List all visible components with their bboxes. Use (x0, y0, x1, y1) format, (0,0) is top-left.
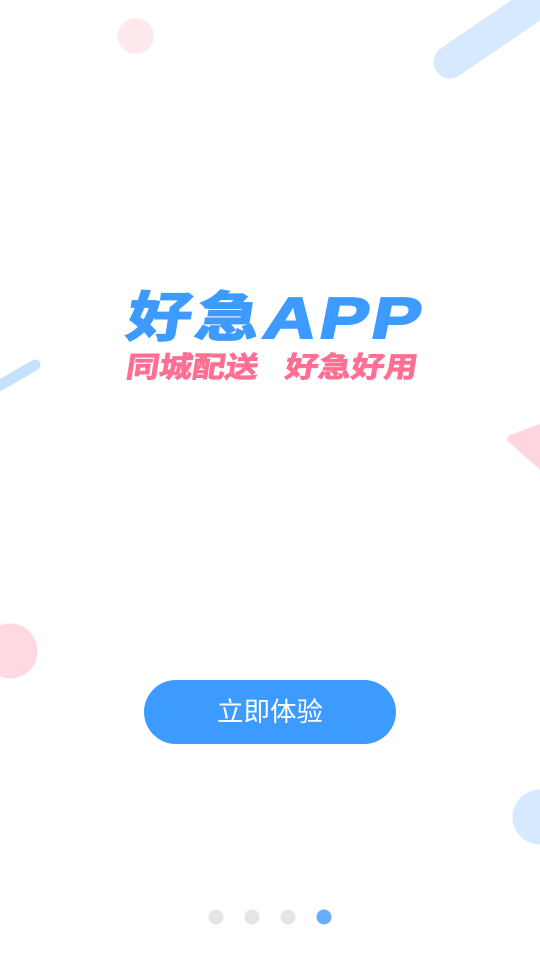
decoration: right blue circle (512, 790, 540, 844)
subtitle: easy to use: 好急好用 (283, 351, 420, 383)
decoration: top right blue bar (450, 0, 540, 62)
title: Chinese name: 好急 (123, 287, 265, 348)
pagination dots (208, 910, 332, 924)
title: APP: APP (258, 286, 428, 351)
subtitle: same-city delivery: 同城配送 (124, 351, 261, 383)
subtitle (124, 351, 420, 383)
button background (144, 680, 396, 744)
dot 4 active (316, 910, 332, 924)
decoration: left small blue bar (0, 365, 35, 394)
decoration: right pink triangle (507, 416, 540, 488)
decoration: top pink circle (118, 18, 154, 54)
dot 1 (208, 910, 224, 924)
title (123, 286, 428, 351)
dot 3 (280, 910, 296, 924)
decoration: left pink circle (0, 624, 38, 678)
button: try now (144, 680, 396, 744)
dot 2 (244, 910, 260, 924)
button label: 立即体验 (217, 697, 323, 727)
